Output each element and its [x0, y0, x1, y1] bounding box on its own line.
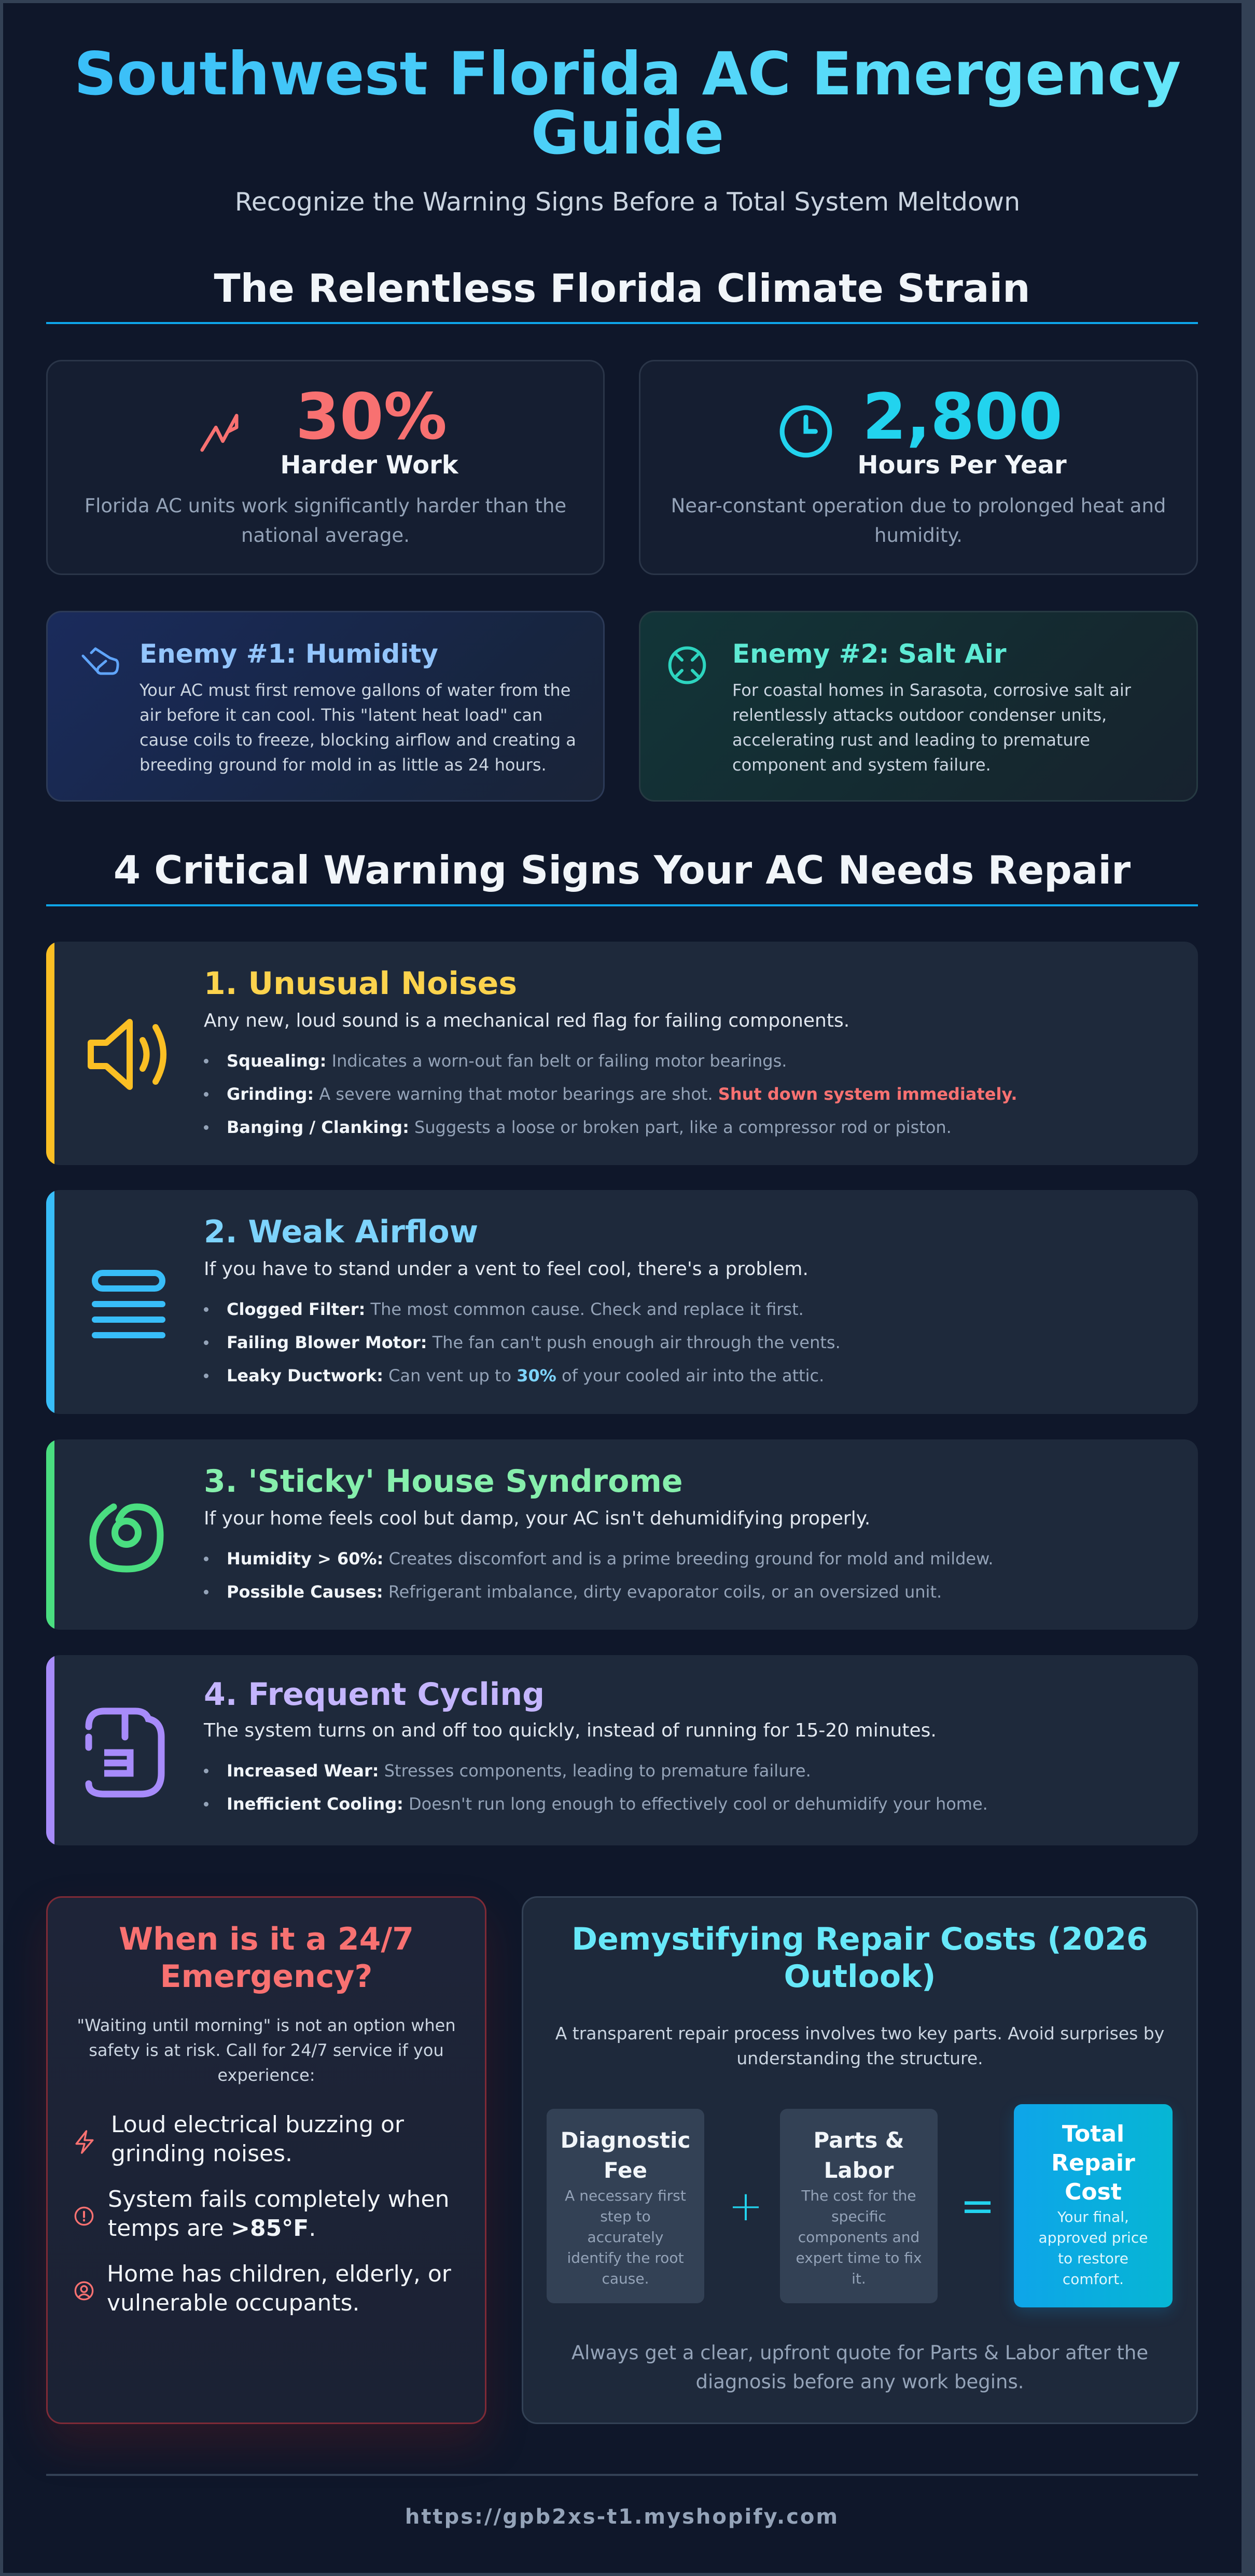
heading: climate strain: The Relentless Florida Climate Strain: [214, 265, 1030, 311]
emergency intro: "Waiting until morning" is not an option when safety is at risk. Call for 24/7 service if you experience:: [77, 2015, 456, 2085]
panel: stat 30%: [46, 360, 605, 575]
panel: sticky house: [46, 1439, 1198, 1630]
stat label: Hours Per Year: [857, 451, 1067, 480]
box: parts labor: The cost for the specific components and expert time to fix it.: [796, 2187, 922, 2287]
box: diagnostic fee: Diagnostic: [561, 2127, 690, 2153]
panel: repair costs: [522, 1896, 1198, 2424]
enemy text: For coastal homes in Sarasota, corrosive salt air relentlessly attacks outdoor condenser units, accelerating rust and leading to premature component and system failure.: [732, 680, 1131, 775]
emergency title: Emergency?: [160, 1958, 372, 1995]
card title: 2. Weak Airflow: [204, 1214, 478, 1250]
card title: 3. 'Sticky' House Syndrome: [204, 1463, 683, 1500]
box: total: Repair: [1051, 2150, 1135, 2176]
title: Guide: [531, 99, 724, 167]
item: vulnerable: [75, 2261, 451, 2316]
icon: trend up: [200, 414, 239, 452]
item: temps: temps are >85°F.: [108, 2215, 316, 2242]
box: total: [1014, 2104, 1173, 2307]
item: buzzing: [75, 2111, 404, 2167]
icon: salt air: [668, 646, 706, 684]
bullet list: [204, 1299, 841, 1385]
box: total: Cost: [1065, 2179, 1122, 2205]
box: parts labor: Parts &: [813, 2127, 904, 2153]
item: buzzing: grinding noises.: [111, 2140, 292, 2167]
item: temps: [75, 2186, 449, 2242]
box: parts labor: [780, 2109, 938, 2303]
panel: enemy salt air: [639, 611, 1198, 802]
box: total: Your final, approved price to restore comfort.: [1039, 2208, 1148, 2288]
bullet list: Possible Causes: Refrigerant imbalance, dirty evaporator coils, or an oversized unit.: [227, 1582, 942, 1602]
enemy title: Enemy #2: Salt Air: [732, 639, 1007, 669]
panel: enemy humidity: [46, 611, 605, 802]
card intro: If your home feels cool but damp, your AC isn't dehumidifying properly.: [204, 1508, 870, 1529]
panel: unusual noises: [46, 942, 1198, 1165]
icon: plus: +: [728, 2182, 763, 2230]
icon: drop swirl: [89, 1504, 164, 1572]
icon: equals: =: [960, 2182, 995, 2230]
panel: emergency: [46, 1896, 486, 2424]
icon: speaker: [88, 1019, 167, 1090]
bullet list: [204, 1761, 988, 1814]
footer url: https://gpb2xs-t1.myshopify.com: [405, 2505, 839, 2529]
item: buzzing: Loud electrical buzzing or: [111, 2111, 404, 2138]
costs footer note: Always get a clear, upfront quote for Parts & Labor after the diagnosis before any work begins.: [571, 2342, 1148, 2393]
costs title: Demystifying Repair Costs (2026: [571, 1921, 1148, 1957]
bullet list: Grinding: A severe warning that motor bearings are shot. Shut down system immediately.: [227, 1084, 1017, 1104]
title: Southwest Florida AC Emergency: [74, 39, 1181, 108]
box: diagnostic fee: [547, 2109, 704, 2303]
costs title: Outlook): [784, 1958, 936, 1995]
emergency title: When is it a 24/7: [119, 1921, 414, 1957]
costs title: [571, 1921, 1148, 1995]
box: parts labor: Labor: [824, 2158, 894, 2183]
stat number: 30%: [296, 380, 447, 454]
bullet list: Squealing: Indicates a worn-out fan belt or failing motor bearings.: [227, 1051, 787, 1071]
icon: clock: [780, 405, 832, 457]
stat description: Florida AC units work significantly harder than the national average.: [85, 495, 566, 547]
card title: 4. Frequent Cycling: [204, 1676, 545, 1713]
card title: 1. Unusual Noises: [204, 965, 517, 1002]
item: vulnerable: vulnerable occupants.: [107, 2290, 360, 2316]
panel: stat 2,800: [639, 360, 1198, 575]
box: diagnostic fee: Fee: [604, 2158, 647, 2183]
enemy text: Your AC must first remove gallons of water from the air before it can cool. This "latent heat load" can cause coils to freeze, blocking airflow and creating a breeding ground for mold in as little as 24 hours.: [140, 680, 576, 775]
icon: cycling: [85, 1708, 165, 1797]
bullet list: [204, 1549, 993, 1602]
bullet list: Humidity > 60%: Creates discomfort and is a prime breeding ground for mold and mildew.: [227, 1549, 993, 1569]
bullet list: Leaky Ductwork: Can vent up to 30% of your cooled air into the attic.: [227, 1366, 824, 1385]
panel: frequent cycling: [46, 1655, 1198, 1845]
box: diagnostic fee: A necessary first step to accurately identify the root cause.: [565, 2187, 686, 2287]
box: total: Total: [1062, 2121, 1124, 2147]
subtitle: Recognize the Warning Signs Before a Total System Meltdown: [235, 187, 1020, 217]
stat label: Harder Work: [280, 451, 458, 480]
card intro: The system turns on and off too quickly, instead of running for 15-20 minutes.: [204, 1720, 937, 1741]
stat description: Near-constant operation due to prolonged heat and humidity.: [671, 495, 1166, 547]
bullet list: Inefficient Cooling: Doesn't run long enough to effectively cool or dehumidify your home.: [227, 1794, 988, 1814]
enemy title: Enemy #1: Humidity: [140, 639, 438, 669]
bullet list: Banging / Clanking: Suggests a loose or broken part, like a compressor rod or piston.: [227, 1117, 952, 1137]
panel: weak airflow: [46, 1190, 1198, 1414]
card intro: If you have to stand under a vent to feel cool, there's a problem.: [204, 1258, 808, 1280]
item: temps: System fails completely when: [108, 2186, 449, 2213]
emergency title: [119, 1921, 414, 1995]
item: vulnerable: Home has children, elderly, or: [107, 2261, 451, 2287]
costs intro: A transparent repair process involves two key parts. Avoid surprises by understanding the structure.: [555, 2023, 1164, 2068]
icon: filter: [92, 1270, 165, 1338]
bullet list: Increased Wear: Stresses components, leading to premature failure.: [227, 1761, 811, 1781]
bullet list: Clogged Filter: The most common cause. Check and replace it first.: [227, 1299, 804, 1319]
stat number: 2,800: [862, 380, 1063, 454]
icon: humidity: [82, 647, 119, 675]
bullet list: Failing Blower Motor: The fan can't push enough air through the vents.: [227, 1333, 841, 1352]
card intro: Any new, loud sound is a mechanical red flag for failing components.: [204, 1010, 849, 1031]
title: [31, 45, 1224, 163]
heading: warning signs: 4 Critical Warning Signs Your AC Needs Repair: [114, 847, 1131, 893]
bullet list: [204, 1051, 1017, 1137]
